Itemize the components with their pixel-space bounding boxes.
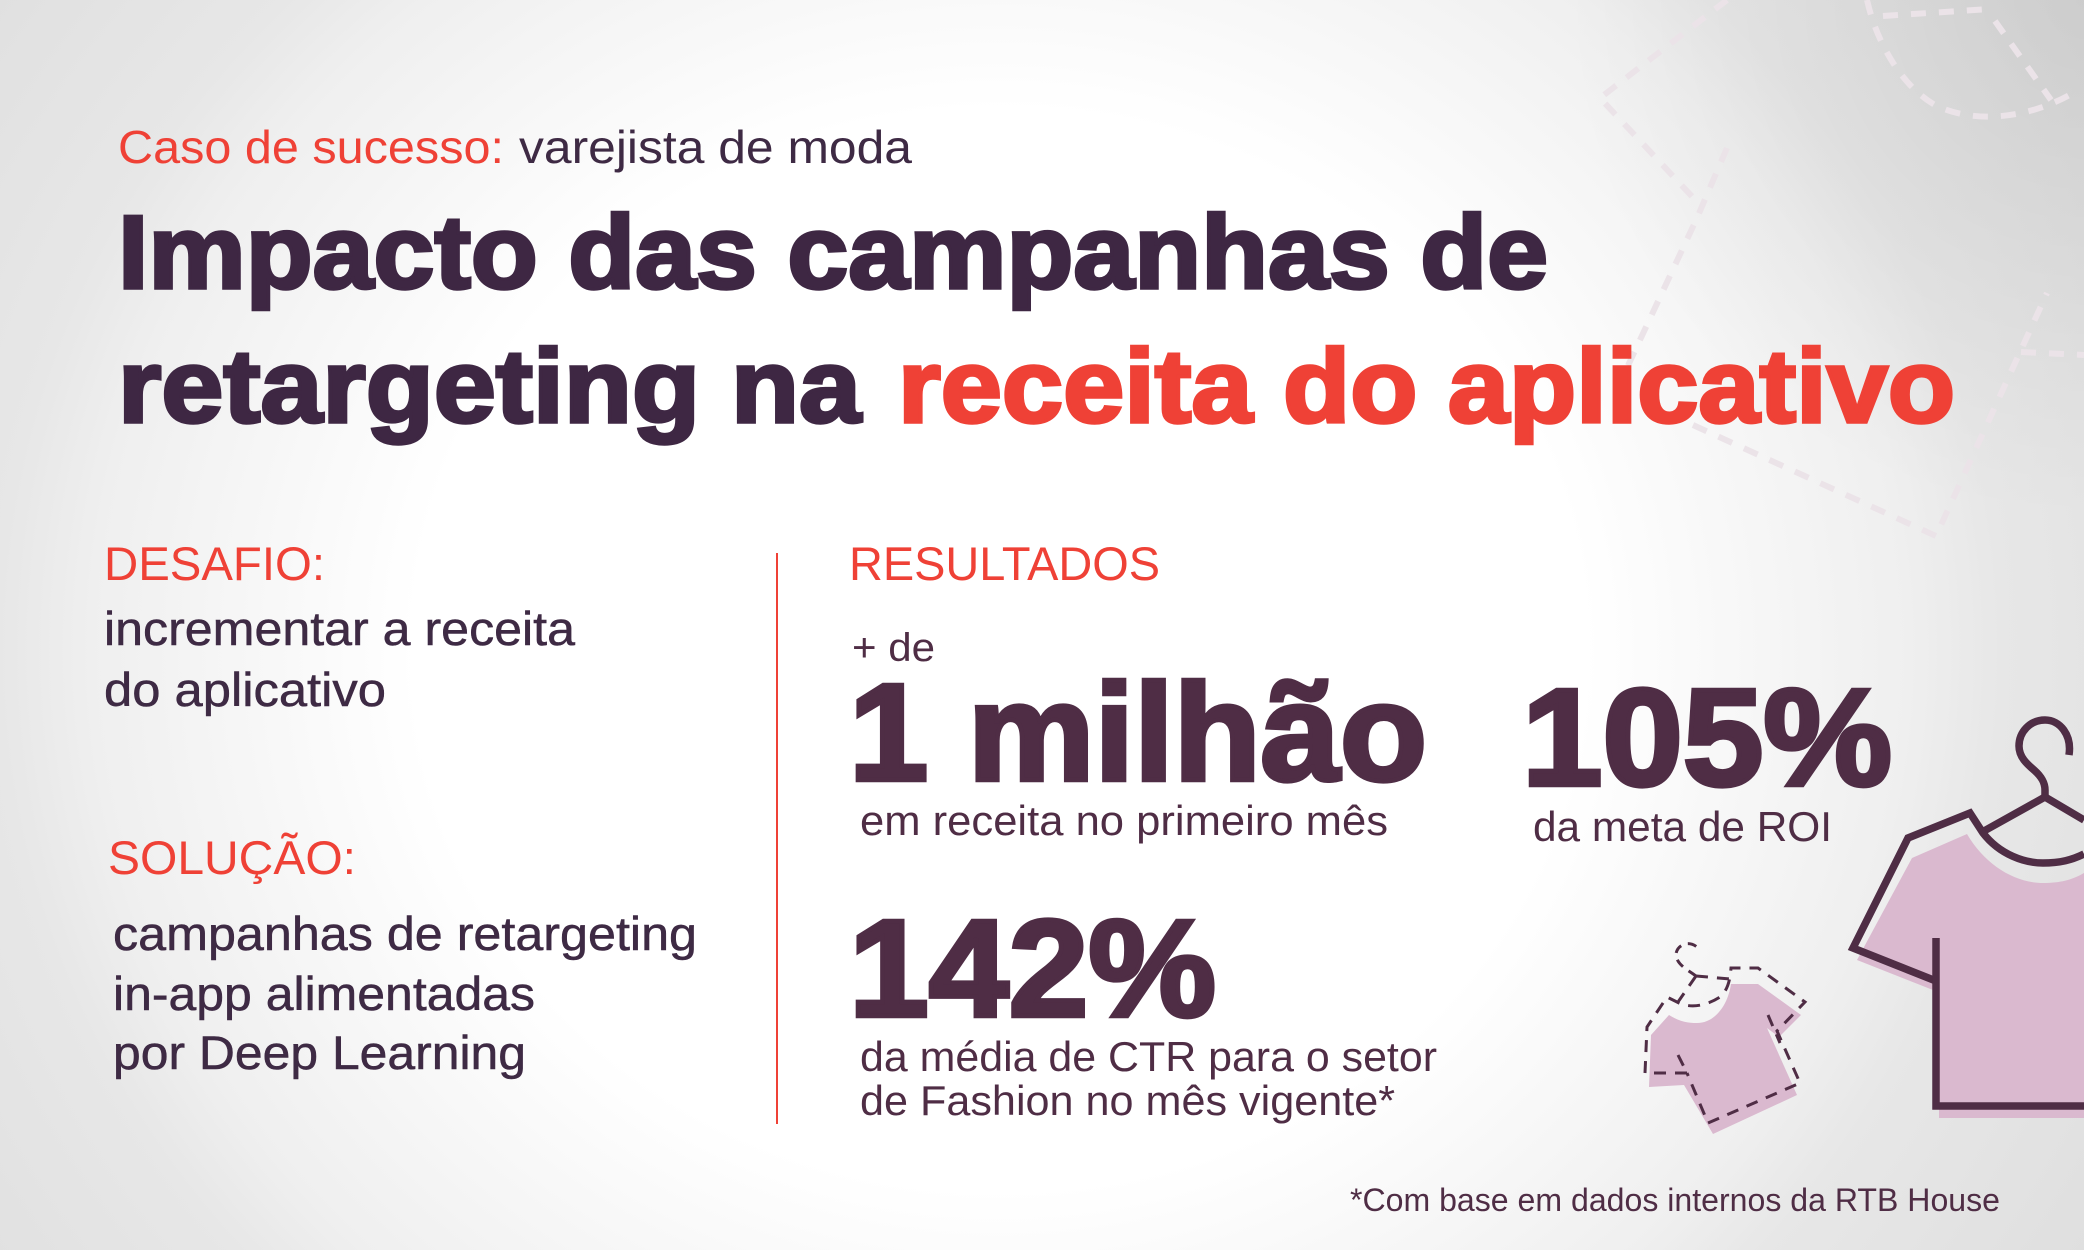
footnote: *Com base em dados internos da RTB House: [1350, 1182, 2000, 1218]
eyebrow: case study label: Caso de sucesso:: [118, 121, 504, 173]
text: desafio body: [104, 602, 576, 716]
stat: 142%: 142%: [849, 892, 1216, 1046]
eyebrow: case study label: varejista de moda: [519, 121, 912, 173]
title: receita do aplicativo: [898, 329, 1955, 445]
title: [118, 195, 1955, 445]
eyebrow: case study label: [118, 121, 912, 173]
text: solucao body: in-app alimentadas: [113, 967, 535, 1020]
title: Impacto das campanhas de: [118, 195, 1548, 311]
text: solucao body: [113, 907, 697, 1079]
text: solucao body: por Deep Learning: [113, 1026, 526, 1079]
stat: 1 milhao: [849, 626, 1427, 844]
text: solucao body: campanhas de retargeting: [113, 907, 697, 960]
background corner shade: [1500, 0, 2084, 520]
stat: 142%: da média de CTR para o setor: [860, 1033, 1437, 1080]
stat: 142%: de Fashion no mês vigente*: [860, 1077, 1395, 1124]
panel: solucao: [108, 831, 697, 1079]
stat: 1 milhao: em receita no primeiro mês: [860, 797, 1388, 844]
panel: desafio: [104, 537, 576, 716]
stat: 105%: da meta de ROI: [1533, 803, 1832, 850]
icon: large shirt on hanger: [1853, 720, 2084, 1118]
title: retargeting na: [118, 329, 862, 445]
panel: resultados: [849, 537, 1892, 1124]
text: desafio body: do aplicativo: [104, 663, 386, 716]
text: desafio body: incrementar a receita: [104, 602, 576, 655]
heading: solucao: SOLUÇÃO:: [108, 831, 356, 884]
stat: 1 milhao: 1 milhão: [849, 656, 1427, 810]
heading: desafio: DESAFIO:: [104, 537, 325, 590]
heading: resultados: RESULTADOS: [849, 537, 1160, 590]
stat: 105%: 105%: [1522, 661, 1892, 815]
vertical divider: [776, 553, 778, 1124]
stat: 1 milhao: + de: [852, 626, 935, 670]
decorative dashed shirt pattern: [1600, 0, 2084, 536]
icon: small dashed shirt: [1645, 944, 1805, 1134]
stat: 142%: [849, 892, 1437, 1124]
